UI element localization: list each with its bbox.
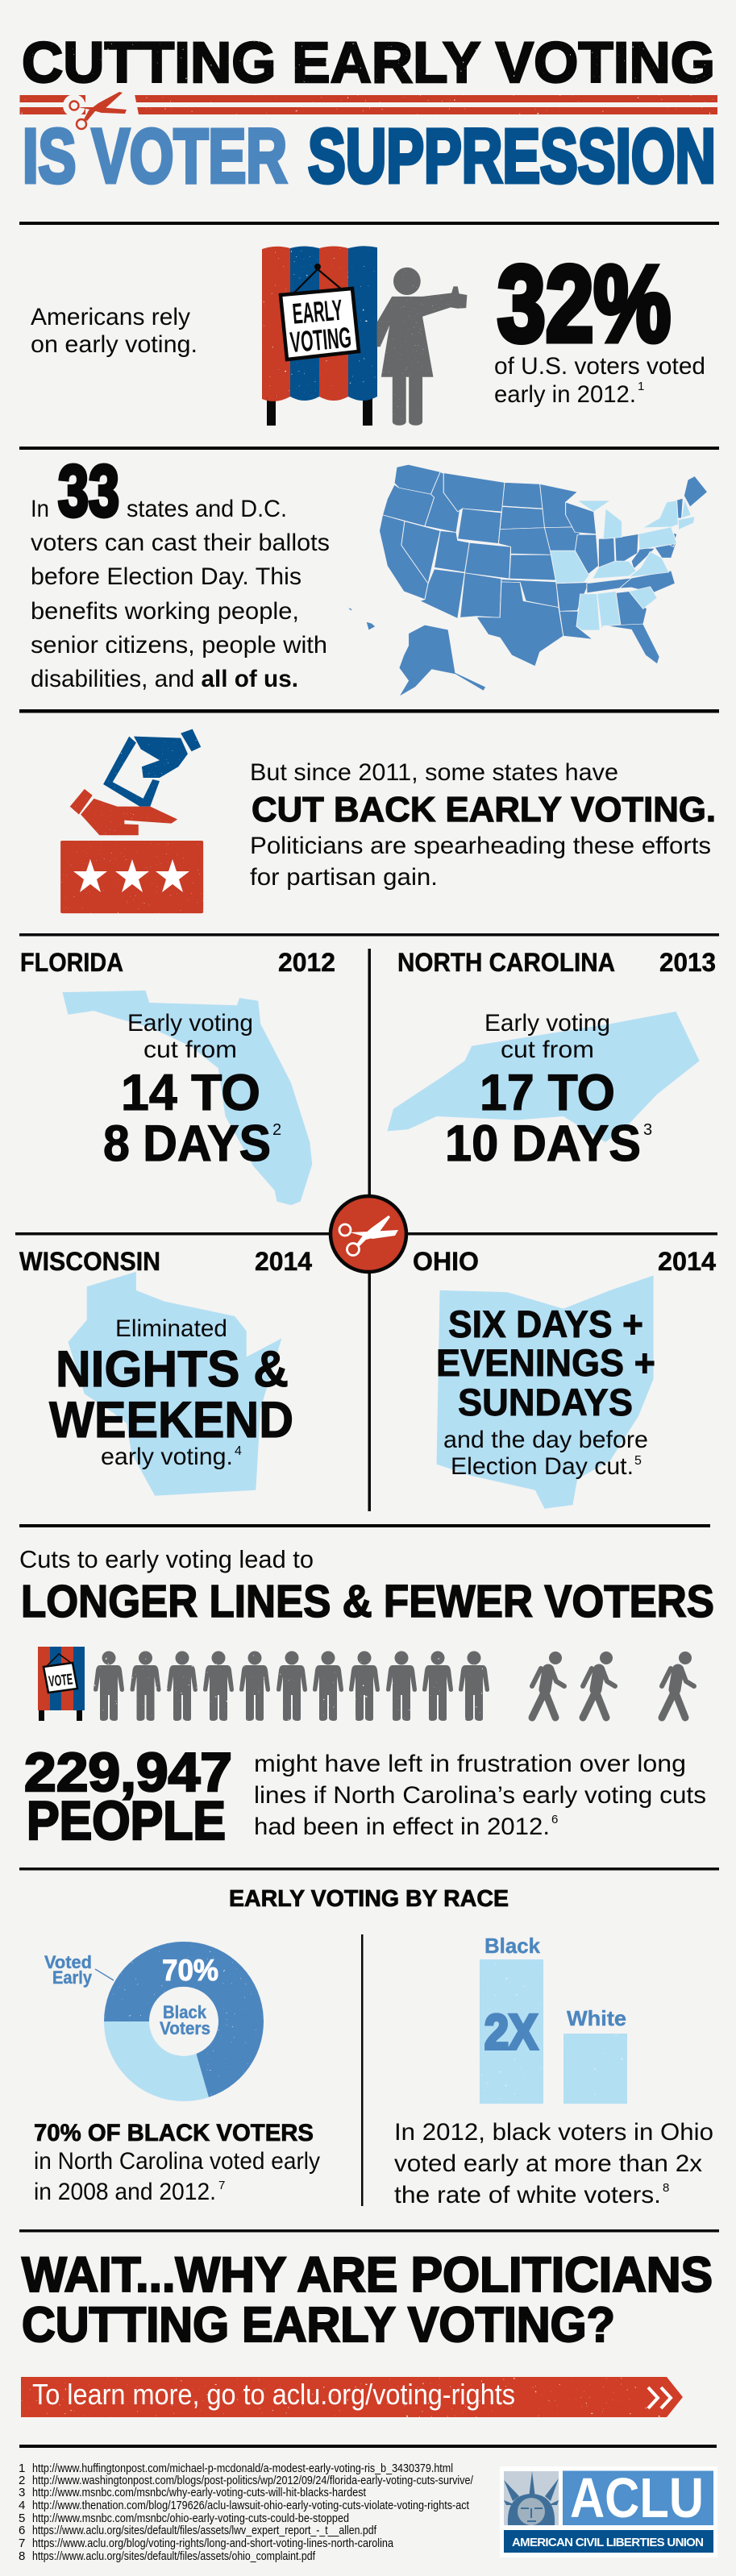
text block: cut back early voting bbox=[250, 759, 716, 891]
heading: longer lines bbox=[19, 1545, 714, 1627]
chart: donut 70 percent: Black bbox=[163, 2002, 207, 2022]
ohio: 5 bbox=[634, 1454, 642, 1468]
divider bbox=[19, 1524, 710, 1527]
map: early voting states bbox=[347, 464, 708, 696]
text block: cut back early voting: Politicians are spearheading these efforts bbox=[250, 833, 711, 859]
text block: 33 states and DC bbox=[31, 451, 330, 692]
chart: donut 70 percent: 70% bbox=[162, 1954, 218, 1987]
closing heading: CUTTING EARLY VOTING? bbox=[22, 2297, 615, 2352]
text block: 70 percent of black voters: 70% OF BLACK VOTERS bbox=[34, 2120, 314, 2146]
text block: 33 states and DC: disabilities, and all of us. bbox=[31, 666, 298, 692]
panel: americans rely on early voting bbox=[31, 244, 705, 426]
text: americans rely: on early voting. bbox=[31, 331, 198, 358]
title line one: CUTTING EARLY VOTING bbox=[22, 31, 715, 95]
closing heading bbox=[22, 2247, 713, 2352]
text: americans rely: Americans rely bbox=[31, 304, 190, 330]
footnotes: 7 bbox=[19, 2537, 25, 2550]
wisconsin: WEEKEND bbox=[49, 1392, 293, 1448]
north carolina: 2013 bbox=[659, 948, 716, 977]
stat: 229,947 people: 229,947 bbox=[24, 1742, 232, 1803]
text block: 33 states and DC: before Election Day. This bbox=[31, 563, 301, 590]
panel: longer lines and fewer voters bbox=[19, 1545, 714, 1851]
stat: 229,947 people: PEOPLE bbox=[27, 1790, 226, 1851]
icon: hand casting ballot into box bbox=[60, 729, 203, 913]
florida: 8 DAYS bbox=[103, 1116, 271, 1172]
panel: 33 states bbox=[31, 451, 708, 696]
panel: four state cuts bbox=[15, 948, 717, 1511]
text block: ohio black voters bbox=[394, 2119, 713, 2208]
stat: 229,947 people bbox=[24, 1742, 232, 1851]
footnotes: https://www.aclu.org/sites/default/files/assets/lwv_expert_report_-_t__allen.pdf bbox=[32, 2524, 377, 2537]
stat: 32 percent: 1 bbox=[638, 380, 644, 393]
text block: cut back early voting: for partisan gain. bbox=[250, 864, 438, 891]
divider bbox=[19, 709, 719, 713]
ohio bbox=[413, 1247, 716, 1480]
title line two: is voter: IS VOTER bbox=[23, 114, 287, 199]
heading: longer lines: Cuts to early voting lead to bbox=[19, 1545, 314, 1573]
text block: 70 percent of black voters: in North Carolina voted early bbox=[34, 2148, 320, 2175]
ohio: and the day before bbox=[443, 1427, 648, 1453]
wisconsin: NIGHTS & bbox=[56, 1341, 289, 1398]
logo: aclu: AMERICAN CIVIL LIBERTIES UNION bbox=[512, 2536, 704, 2549]
text block: cut back early voting: But since 2011, some states have bbox=[250, 759, 618, 786]
divider bbox=[19, 447, 719, 450]
footnotes: 2 bbox=[19, 2474, 25, 2487]
divider bbox=[19, 2445, 717, 2448]
logo: aclu: ACLU bbox=[570, 2466, 704, 2529]
chart: black vs white bars: White bbox=[567, 2006, 626, 2030]
icon: scissors cutting stripes bbox=[63, 90, 139, 129]
divider bbox=[19, 1868, 719, 1870]
text block: 33 states and DC: In bbox=[31, 496, 49, 522]
text block: ohio black voters: 8 bbox=[663, 2181, 669, 2195]
north carolina bbox=[397, 948, 716, 1172]
florida: 2012 bbox=[278, 948, 335, 977]
text block: ohio black voters: voted early at more than 2x bbox=[394, 2150, 702, 2177]
panel: cut back early voting bbox=[60, 729, 716, 913]
wisconsin bbox=[19, 1247, 312, 1470]
icon: statue of liberty bbox=[504, 2471, 559, 2525]
text block: 33 states and DC: 33 bbox=[58, 451, 119, 532]
chart: black vs white bars: Black bbox=[484, 1934, 541, 1958]
divider bbox=[19, 222, 719, 225]
closing heading: WAIT...WHY ARE POLITICIANS bbox=[22, 2247, 713, 2302]
footnotes: 1 bbox=[19, 2462, 25, 2475]
footnotes: https://www.aclu.org/sites/default/files/assets/ohio_complaint.pdf bbox=[32, 2549, 316, 2563]
stat: 32 percent: early in 2012. bbox=[494, 381, 636, 408]
north carolina: cut from bbox=[501, 1037, 594, 1063]
red stripes bbox=[19, 95, 717, 114]
chart: black vs white bars bbox=[480, 1934, 627, 2104]
north carolina: 3 bbox=[643, 1121, 652, 1139]
title bbox=[19, 31, 717, 199]
footnotes: http://www.msnbc.com/msnbc/ohio-early-voting-cuts-could-be-stopped bbox=[32, 2512, 349, 2525]
stat: 32 percent: 32% bbox=[497, 244, 671, 364]
footnotes: http://www.thenation.com/blog/179626/aclu-lawsuit-ohio-early-voting-cuts-violate-voting-rights-act bbox=[32, 2499, 470, 2512]
ohio: 2014 bbox=[658, 1247, 716, 1276]
icon: small voting booth bbox=[38, 1647, 85, 1721]
logo: aclu bbox=[500, 2466, 717, 2557]
heading: early voting by race: EARLY VOTING BY RACE bbox=[229, 1886, 509, 1912]
footnotes: http://www.washingtonpost.com/blogs/post-politics/wp/2012/09/24/florida-early-voting-cuts-survive/ bbox=[32, 2474, 474, 2487]
north carolina: 17 TO bbox=[480, 1065, 615, 1121]
footnotes: 6 bbox=[19, 2524, 25, 2537]
ohio: OHIO bbox=[413, 1247, 479, 1276]
icon: double chevron bbox=[648, 2387, 671, 2408]
footnotes: 8 bbox=[19, 2549, 25, 2563]
callout: voted early bbox=[44, 1952, 114, 1988]
wisconsin: 2014 bbox=[255, 1247, 312, 1276]
text block: ohio black voters: In 2012, black voters in Ohio bbox=[394, 2119, 713, 2146]
map shapes: states bbox=[62, 991, 700, 1509]
text block: 33 states and DC: voters can cast their ballots bbox=[31, 530, 330, 556]
quadrant lines bbox=[15, 949, 717, 1511]
divider bbox=[19, 2229, 719, 2233]
florida: 14 TO bbox=[121, 1065, 260, 1121]
text: americans rely bbox=[31, 304, 198, 358]
text block: 70 percent of black voters: 7 bbox=[218, 2179, 225, 2192]
wisconsin: early voting. bbox=[101, 1444, 233, 1470]
ohio: SIX DAYS + bbox=[448, 1303, 643, 1345]
divider bbox=[19, 933, 719, 937]
text block: 33 states and DC: states and D.C. bbox=[127, 496, 287, 522]
icon: voting booth: EARLY bbox=[291, 293, 343, 330]
text block: 33 states and DC: senior citizens, people with bbox=[31, 632, 327, 659]
callout: voted early: Voted bbox=[44, 1952, 92, 1972]
ohio: EVENINGS + bbox=[436, 1341, 655, 1384]
icon row: people in line bbox=[94, 1651, 489, 1721]
florida bbox=[20, 948, 335, 1172]
text block: left in frustration: 6 bbox=[551, 1813, 558, 1826]
text block: 33 states and DC: benefits working people, bbox=[31, 598, 299, 625]
panel: early voting by race bbox=[34, 1886, 713, 2208]
footnotes: 4 bbox=[19, 2499, 25, 2512]
icon: voting booth bbox=[262, 246, 377, 426]
ohio: Election Day cut. bbox=[451, 1453, 634, 1480]
wisconsin: 4 bbox=[235, 1444, 242, 1458]
footnotes: 3 bbox=[19, 2486, 25, 2499]
footnotes bbox=[19, 2462, 474, 2563]
vertical separator bbox=[361, 1934, 363, 2206]
text block: left in frustration bbox=[254, 1751, 706, 1840]
wisconsin: Eliminated bbox=[115, 1315, 227, 1342]
text block: left in frustration: had been in effect in 2012. bbox=[254, 1814, 550, 1840]
footnotes: http://www.msnbc.com/msnbc/why-early-voting-cuts-will-hit-blacks-hardest bbox=[32, 2486, 367, 2499]
north carolina: NORTH CAROLINA bbox=[397, 948, 615, 977]
florida: cut from bbox=[143, 1037, 237, 1063]
footnotes: 5 bbox=[19, 2512, 25, 2525]
chart: donut 70 percent: Voters bbox=[160, 2018, 210, 2038]
call to action arrow bbox=[21, 2377, 683, 2417]
icon: small voting booth: VOTE bbox=[48, 1671, 73, 1690]
call to action arrow: To learn more, go to aclu.org/voting-rights bbox=[32, 2378, 515, 2411]
text block: 70 percent of black voters: in 2008 and 2012. bbox=[34, 2179, 216, 2205]
footnotes: https://www.aclu.org/blog/voting-rights/long-and-short-voting-lines-north-carolina bbox=[32, 2537, 394, 2550]
icon: woman giving thumbs up bbox=[377, 268, 467, 426]
wisconsin: WISCONSIN bbox=[19, 1247, 160, 1276]
ohio: SUNDAYS bbox=[458, 1381, 633, 1423]
text block: left in frustration: might have left in frustration over long bbox=[254, 1751, 686, 1777]
text block: 70 percent of black voters bbox=[34, 2120, 320, 2205]
icon: scissors badge bbox=[331, 1196, 406, 1272]
text block: cut back early voting: CUT BACK EARLY VOTING. bbox=[252, 790, 716, 829]
florida: Early voting bbox=[127, 1010, 253, 1037]
north carolina: Early voting bbox=[484, 1010, 610, 1037]
chart: donut 70 percent bbox=[104, 1942, 264, 2101]
icon: voting booth: VOTING bbox=[289, 321, 352, 359]
florida: FLORIDA bbox=[20, 948, 123, 977]
north carolina: 10 DAYS bbox=[445, 1116, 641, 1172]
florida: 2 bbox=[272, 1121, 281, 1139]
callout: voted early: Early bbox=[52, 1967, 93, 1988]
footnotes: http://www.huffingtonpost.com/michael-p-mcdonald/a-modest-early-voting-ris_b_3430379.html bbox=[32, 2462, 453, 2475]
chart: black vs white bars: 2X bbox=[484, 2005, 538, 2059]
text block: ohio black voters: the rate of white voters. bbox=[394, 2182, 661, 2208]
stat: 32 percent: of U.S. voters voted bbox=[494, 353, 705, 380]
text block: left in frustration: lines if North Carolina’s early voting cuts bbox=[254, 1782, 706, 1809]
icon row: people walking away bbox=[532, 1652, 694, 1718]
